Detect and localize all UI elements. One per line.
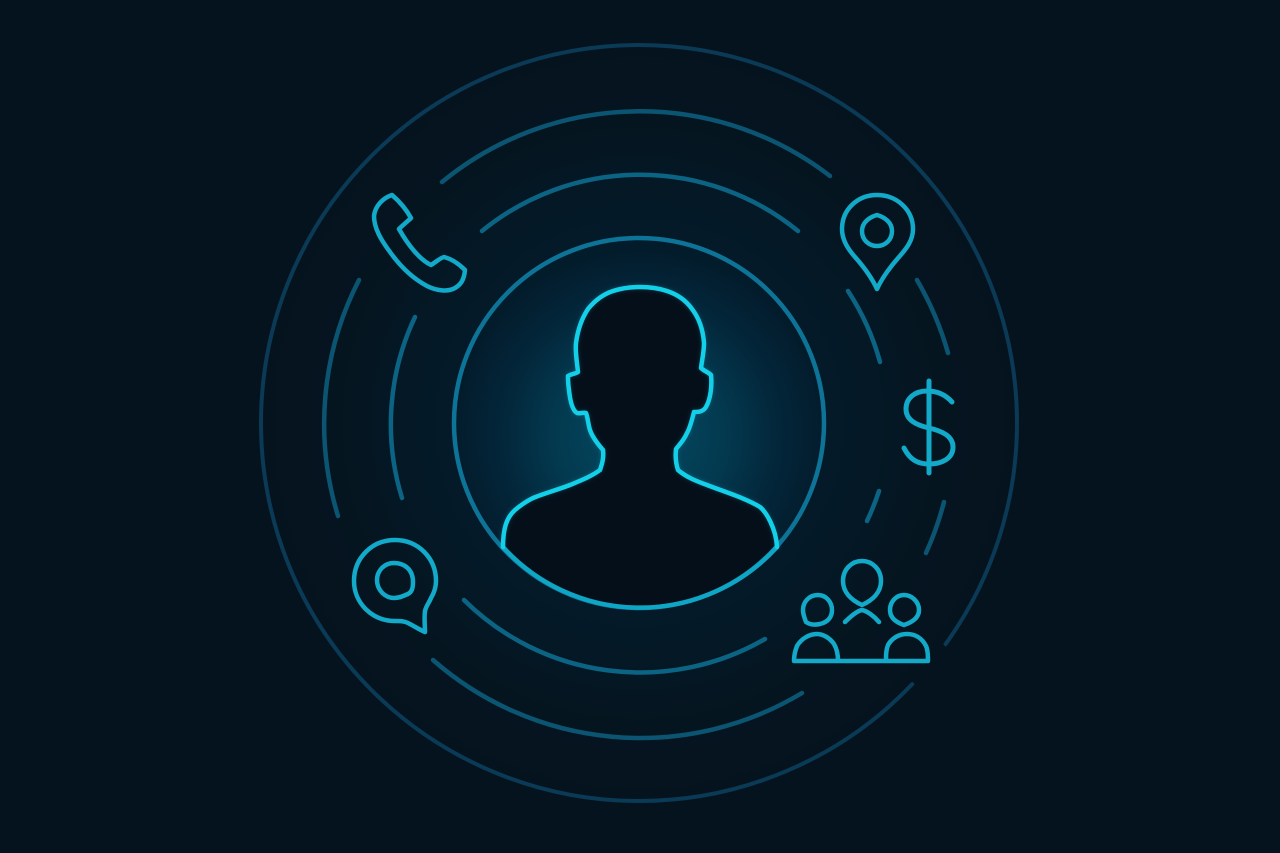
centre person	[843, 561, 881, 605]
inner circle glow	[454, 238, 824, 608]
icon: group of people	[794, 561, 928, 661]
icon: location pin	[842, 195, 913, 289]
person silhouette fill	[506, 289, 774, 606]
outer ring	[261, 45, 1017, 801]
inner circle	[454, 238, 824, 608]
background glow	[259, 43, 1019, 803]
icon: speech bubble	[354, 540, 436, 632]
illustration: customer profile rings	[259, 43, 1019, 803]
table and bodies	[794, 634, 928, 661]
person silhouette outline glow	[503, 287, 777, 547]
centre person shoulders	[845, 610, 879, 622]
person silhouette outline	[503, 287, 777, 547]
icon: dollar sign	[904, 381, 953, 473]
ring 3 arcs	[324, 111, 948, 738]
left person head	[803, 595, 832, 625]
right person head	[890, 595, 919, 625]
icon: phone	[374, 195, 465, 290]
inner circle bottom highlight	[503, 547, 777, 608]
ring 2 arcs	[391, 175, 880, 672]
